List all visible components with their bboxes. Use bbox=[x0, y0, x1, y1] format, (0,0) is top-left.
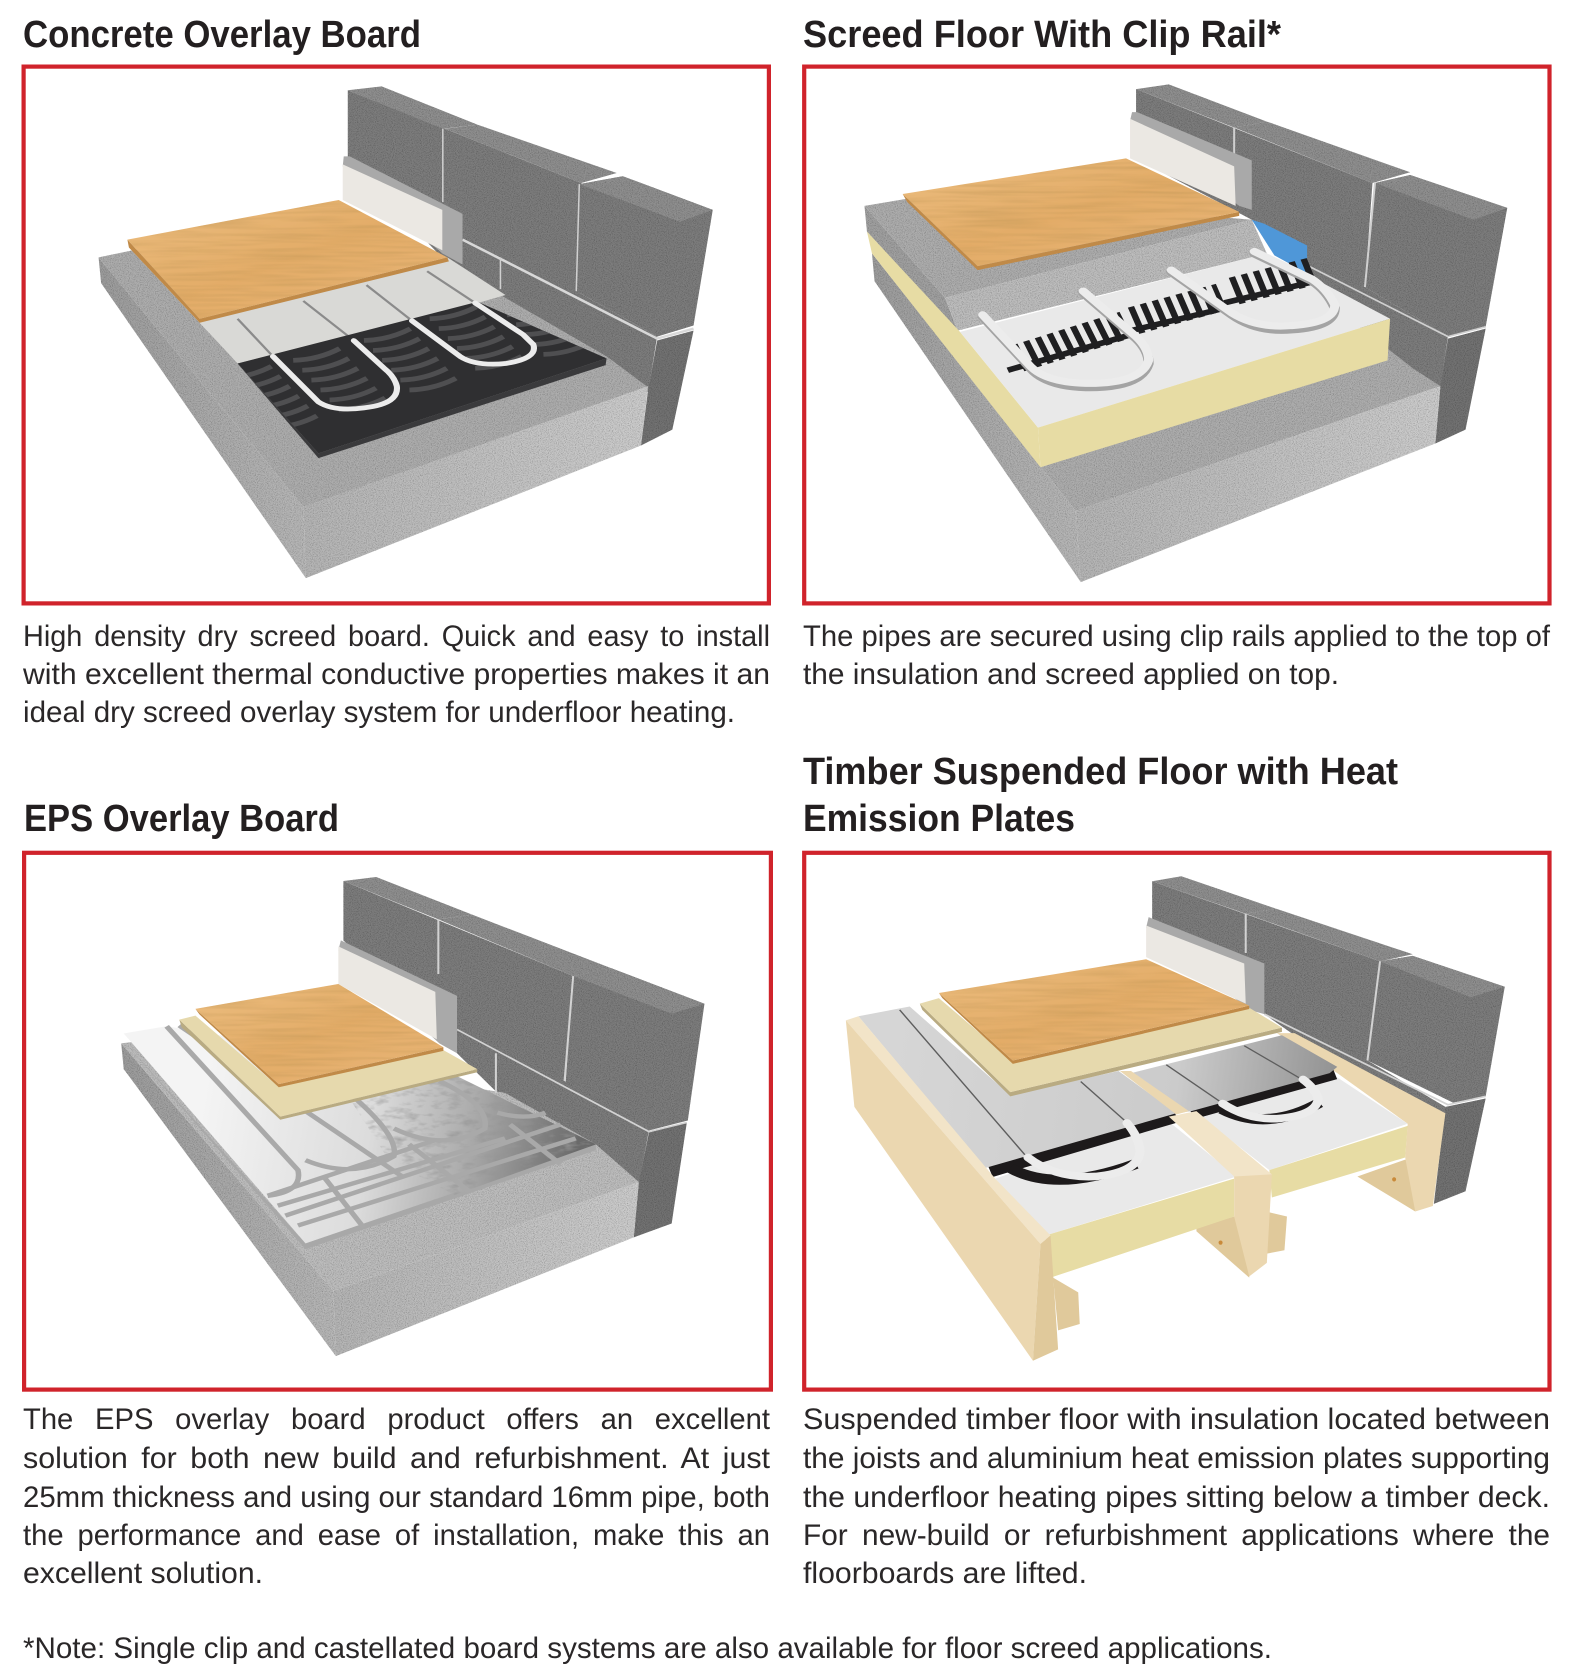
underlay bbox=[179, 1020, 477, 1120]
description: The pipes are secured using clip rails applied to the top of bbox=[803, 620, 1551, 653]
panel: concrete overlay board bbox=[22, 14, 770, 729]
EPS foil board bbox=[124, 1041, 596, 1249]
image frame bbox=[24, 853, 771, 1390]
skirting bbox=[338, 940, 457, 1053]
pipe trench bbox=[990, 1073, 1335, 1171]
insulation bbox=[995, 1120, 1237, 1235]
illustration: EPS overlay build-up bbox=[121, 877, 704, 1356]
description: High density dry screed board. Quick and easy to install bbox=[23, 620, 770, 653]
pipes bbox=[273, 341, 397, 409]
description bbox=[803, 1403, 1550, 1590]
panel: screed floor with clip rail bbox=[803, 14, 1551, 691]
pipes bbox=[983, 293, 1149, 387]
description: solution for both new build and refurbishment. At just bbox=[23, 1442, 771, 1475]
pipes bbox=[1028, 1123, 1140, 1177]
clip rails bbox=[1008, 271, 1312, 370]
heading: EPS Overlay Board bbox=[24, 798, 339, 840]
panel: timber suspended floor bbox=[803, 751, 1550, 1590]
black castellated mat bbox=[238, 358, 607, 458]
illustration: timber suspended floor build-up bbox=[846, 876, 1505, 1361]
timber floor bbox=[903, 194, 1239, 270]
heading line 2: Emission Plates bbox=[803, 798, 1075, 840]
right joist bbox=[1277, 1033, 1445, 1211]
timber bearers bbox=[1053, 1160, 1420, 1330]
footnote: *Note: Single clip and castellated board systems are also available for floor screed applications. bbox=[23, 1632, 1272, 1665]
skirting bbox=[1146, 917, 1264, 1014]
heading: Timber Suspended Floor with Heat bbox=[803, 751, 1398, 793]
description: The EPS overlay board product offers an excellent bbox=[23, 1403, 771, 1436]
illustration: screed floor build-up bbox=[864, 84, 1507, 582]
description: excellent solution. bbox=[23, 1557, 263, 1590]
heading: Screed Floor With Clip Rail* bbox=[803, 14, 1281, 56]
description bbox=[803, 620, 1551, 691]
image frame bbox=[804, 853, 1550, 1390]
description: For new-build or refurbishment applications where the bbox=[803, 1519, 1550, 1552]
heading: Concrete Overlay Board bbox=[23, 14, 421, 56]
insulation bbox=[867, 232, 1040, 467]
grooves bbox=[167, 1026, 576, 1227]
aluminium plates bbox=[858, 1007, 1176, 1168]
description: with excellent thermal conductive properties makes it an bbox=[22, 658, 770, 691]
centre joist back section bbox=[1120, 1071, 1189, 1114]
centre joist bbox=[1169, 1111, 1272, 1179]
overlay board bbox=[129, 248, 506, 364]
description: 25mm thickness and using our standard 16mm pipe, both bbox=[23, 1481, 770, 1514]
blue edge strip bbox=[1252, 220, 1307, 273]
description: the performance and ease of installation, make this an bbox=[23, 1519, 770, 1552]
front joist bbox=[846, 1016, 1051, 1244]
skirting bbox=[1130, 112, 1252, 210]
timber floor bbox=[939, 993, 1249, 1064]
description bbox=[23, 1403, 771, 1590]
description: the underfloor heating pipes sitting below a timber deck. bbox=[803, 1481, 1550, 1514]
description: the insulation and screed applied on top. bbox=[803, 658, 1339, 691]
illustration: concrete overlay floor build-up bbox=[99, 86, 713, 578]
image frame bbox=[804, 67, 1550, 603]
timber floor bbox=[127, 240, 449, 323]
panel: EPS overlay board bbox=[23, 798, 771, 1590]
underlay bbox=[920, 1004, 1282, 1096]
description: Suspended timber floor with insulation located between bbox=[803, 1403, 1550, 1436]
description bbox=[22, 620, 770, 729]
description: ideal dry screed overlay system for underfloor heating. bbox=[23, 696, 735, 729]
description: the joists and aluminium heat emission plates supporting bbox=[803, 1442, 1550, 1475]
skirting bbox=[343, 156, 463, 265]
foil mottling bbox=[323, 1057, 596, 1195]
image frame bbox=[24, 67, 769, 603]
timber floor bbox=[195, 1009, 443, 1087]
description: floorboards are lifted. bbox=[803, 1557, 1087, 1590]
